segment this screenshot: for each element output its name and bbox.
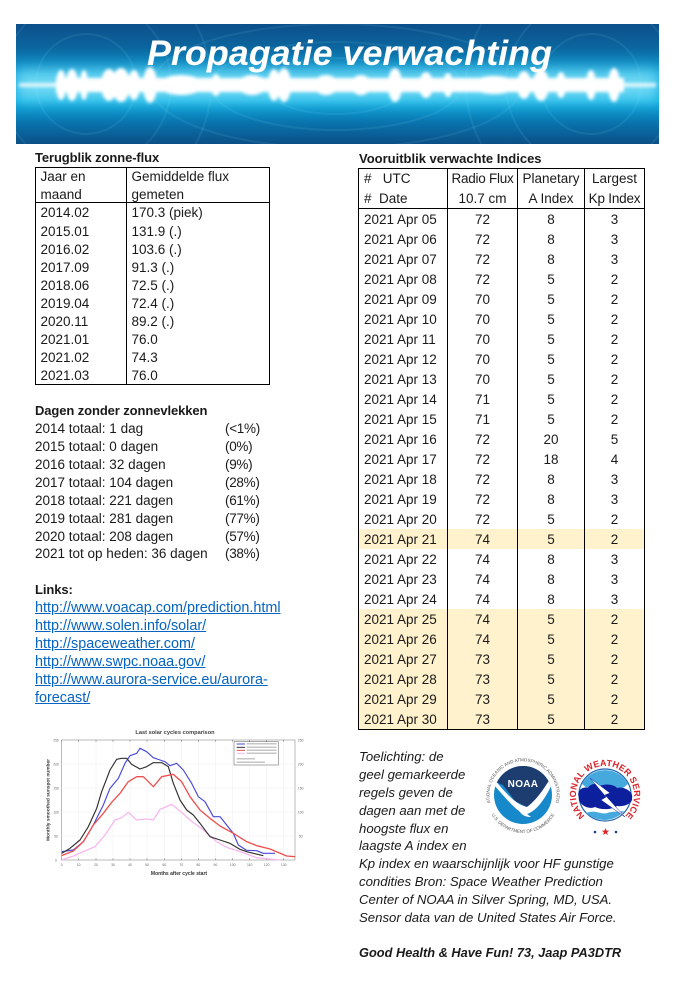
chart: last solar cycles comparison: 100	[53, 811, 59, 815]
chart: last solar cycles comparison: Monthly smoothed sunspot number	[45, 759, 51, 841]
table: vooruitblik verwachte indices: 73	[475, 652, 490, 666]
chart: last solar cycles comparison: 50	[145, 863, 149, 867]
table: vooruitblik verwachte indices: 5	[547, 392, 555, 406]
banner	[16, 24, 659, 144]
table: vooruitblik verwachte indices: 2021 Apr 26	[364, 632, 437, 646]
note: toelichting: dagen aan met de	[359, 803, 465, 818]
table: vooruitblik verwachte indices: 5	[547, 712, 555, 726]
table: vooruitblik verwachte indices: 2021 Apr 24	[364, 592, 437, 606]
table: vooruitblik verwachte indices: 5	[547, 512, 555, 526]
table: terugblik zonne-flux: 2018.06	[40, 278, 89, 293]
note: toelichting: geel gemarkeerde	[359, 767, 465, 782]
table: vooruitblik verwachte indices: 72	[475, 212, 490, 226]
table: vooruitblik verwachte indices: 3	[611, 552, 618, 566]
table: terugblik zonne-flux: 2021.02	[40, 350, 89, 365]
table: vooruitblik verwachte indices: 18	[543, 452, 559, 466]
table: vooruitblik verwachte indices: 5	[611, 432, 618, 446]
table: vooruitblik verwachte indices: Kp Index	[589, 190, 640, 206]
chart: last solar cycles comparison: Months after cycle start	[151, 871, 207, 877]
table: vooruitblik verwachte indices: 2	[611, 392, 618, 406]
table: vooruitblik verwachte indices: 2021 Apr 30	[364, 712, 437, 726]
chart: last solar cycles comparison: 0	[61, 863, 63, 867]
table: vooruitblik verwachte indices: 3	[611, 492, 618, 506]
table: vooruitblik verwachte indices: Radio Flux	[451, 170, 514, 186]
table: vooruitblik verwachte indices: 70	[475, 352, 490, 366]
icon: red star	[602, 828, 609, 835]
table: vooruitblik verwachte indices: 2021 Apr 14	[364, 392, 437, 406]
list: dagen zonder zonnevlekken	[35, 421, 260, 561]
banner title: Propagatie verwachting	[147, 34, 552, 73]
table: terugblik zonne-flux: Jaar en	[40, 169, 86, 184]
table: vooruitblik verwachte indices: 73	[475, 672, 490, 686]
table: vooruitblik verwachte indices: 2	[611, 372, 618, 386]
table: vooruitblik verwachte indices: 2021 Apr 29	[364, 692, 437, 706]
chart: last solar cycles comparison: 150	[298, 787, 304, 791]
chart: last solar cycles comparison: 200	[53, 763, 59, 767]
table: vooruitblik verwachte indices: 2021 Apr 06	[364, 232, 437, 246]
table: vooruitblik verwachte indices: 2021 Apr 27	[364, 652, 437, 666]
table: terugblik zonne-flux: 2021.01	[40, 332, 89, 347]
list: dagen zonder zonnevlekken: 2021 tot op heden: 36 dagen	[35, 546, 208, 561]
list: dagen zonder zonnevlekken: (<1%)	[225, 421, 260, 436]
table: vooruitblik verwachte indices: 3	[611, 472, 618, 486]
table: vooruitblik verwachte indices: 72	[475, 252, 490, 266]
list: dagen zonder zonnevlekken: (61%)	[225, 493, 260, 508]
table: vooruitblik verwachte indices: 2021 Apr 16	[364, 432, 437, 446]
table: vooruitblik verwachte indices: 74	[475, 532, 490, 546]
table: vooruitblik verwachte indices: 2021 Apr 12	[364, 352, 437, 366]
table: vooruitblik verwachte indices: 5	[547, 532, 555, 546]
list: dagen zonder zonnevlekken: (0%)	[225, 439, 252, 454]
table: vooruitblik verwachte indices: 5	[547, 612, 555, 626]
table: vooruitblik verwachte indices: 3	[611, 212, 618, 226]
table: terugblik zonne-flux: 2016.02	[40, 242, 89, 257]
table: vooruitblik verwachte indices: 8	[547, 592, 555, 606]
table: vooruitblik verwachte indices: 2021 Apr 08	[364, 272, 437, 286]
chart: last solar cycles comparison: Last solar cycles comparison	[135, 730, 215, 736]
table: vooruitblik verwachte indices: 2	[611, 512, 618, 526]
table: vooruitblik verwachte indices: 72	[475, 492, 490, 506]
table: vooruitblik verwachte indices: 8	[547, 212, 555, 226]
table: vooruitblik verwachte indices: # UTC	[364, 170, 411, 186]
icon: National Weather Service logo: NATIONAL WEATHER SERVICE	[570, 760, 640, 820]
table: terugblik zonne-flux: 103.6 (.)	[132, 242, 182, 257]
chart: last solar cycles comparison: 120	[264, 863, 270, 867]
table: vooruitblik verwachte indices: 10.7 cm	[458, 190, 507, 206]
table: vooruitblik verwachte indices: 70	[475, 372, 490, 386]
table: vooruitblik verwachte indices: 3	[611, 252, 618, 266]
table: terugblik zonne-flux: 2015.01	[40, 224, 89, 239]
table: terugblik zonne-flux: 72.5 (.)	[132, 278, 174, 293]
table: vooruitblik verwachte indices: 2021 Apr 11	[364, 332, 436, 346]
table: vooruitblik verwachte indices: 2	[611, 612, 618, 626]
chart: last solar cycles comparison: 130	[281, 863, 287, 867]
chart: last solar cycles comparison: 20	[94, 863, 98, 867]
table: vooruitblik verwachte indices: A Index	[528, 190, 574, 206]
table: terugblik zonne-flux	[34, 167, 270, 385]
table: vooruitblik verwachte indices: 72	[475, 472, 490, 486]
chart: last solar cycles comparison: 90	[213, 863, 217, 867]
table: vooruitblik verwachte indices: 2	[611, 352, 618, 366]
note: toelichting: Kp index en waarschijnlijk voor HF gunstige	[359, 856, 614, 871]
table: vooruitblik verwachte indices: 2	[611, 692, 618, 706]
table: vooruitblik verwachte indices: 3	[611, 572, 618, 586]
table: terugblik zonne-flux: 74.3	[132, 350, 158, 365]
list: dagen zonder zonnevlekken: (38%)	[225, 546, 260, 561]
table: vooruitblik verwachte indices	[358, 168, 645, 730]
heading: terugblik zonne-flux: Terugblik zonne-flux	[35, 150, 159, 165]
heading: dagen zonder zonnevlekken: Dagen zonder zonnevlekken	[35, 403, 207, 418]
list: links: http://spaceweather.com/	[35, 636, 195, 652]
table: vooruitblik verwachte indices: 72	[475, 432, 490, 446]
list: dagen zonder zonnevlekken: 2018 totaal: 221 dagen	[35, 493, 173, 508]
table: vooruitblik verwachte indices: 71	[475, 392, 490, 406]
chart: last solar cycles comparison: 0	[55, 859, 57, 863]
table: vooruitblik verwachte indices: 72	[475, 452, 490, 466]
table: vooruitblik verwachte indices: 5	[547, 692, 555, 706]
table: vooruitblik verwachte indices: 2	[611, 672, 618, 686]
table: vooruitblik verwachte indices: # Date	[364, 190, 408, 206]
table: vooruitblik verwachte indices: 2021 Apr 07	[364, 252, 437, 266]
list: links: http://www.aurora-service.eu/aurora-	[35, 672, 268, 688]
table: vooruitblik verwachte indices: 74	[475, 632, 490, 646]
note: toelichting: regels geven de	[359, 785, 453, 800]
table: vooruitblik verwachte indices: 2021 Apr 21	[364, 532, 437, 546]
list: links: http://www.solen.info/solar/	[35, 618, 206, 634]
table: vooruitblik verwachte indices: 2021 Apr 05	[364, 212, 437, 226]
list: dagen zonder zonnevlekken: (28%)	[225, 475, 260, 490]
list: dagen zonder zonnevlekken: 2020 totaal: 208 dagen	[35, 529, 173, 544]
table: vooruitblik verwachte indices: 8	[547, 552, 555, 566]
table: vooruitblik verwachte indices: 2021 Apr 18	[364, 472, 437, 486]
icon: NOAA logo: U.S. DEPARTMENT OF COMMERCE	[492, 813, 554, 833]
chart: last solar cycles comparison: 70	[179, 863, 183, 867]
table: vooruitblik verwachte indices: 2	[611, 312, 618, 326]
chart: last solar cycles comparison: 200	[298, 763, 304, 767]
table: vooruitblik verwachte indices: 71	[475, 412, 490, 426]
table: vooruitblik verwachte indices: 74	[475, 572, 490, 586]
table: vooruitblik verwachte indices: 5	[547, 352, 555, 366]
table: terugblik zonne-flux: 2017.09	[40, 260, 89, 275]
table: vooruitblik verwachte indices: 74	[475, 552, 490, 566]
chart: last solar cycles comparison	[45, 730, 304, 877]
list: links	[35, 600, 281, 706]
heading: vooruitblik verwachte indices: Vooruitblik verwachte Indices	[359, 151, 542, 166]
table: vooruitblik verwachte indices: 2	[611, 412, 618, 426]
table: vooruitblik verwachte indices: 2021 Apr 15	[364, 412, 437, 426]
table: vooruitblik verwachte indices: 2021 Apr 19	[364, 492, 437, 506]
chart: last solar cycles comparison: 50	[299, 835, 303, 839]
chart: last solar cycles comparison: 50	[54, 835, 58, 839]
table: vooruitblik verwachte indices: 5	[547, 312, 555, 326]
table: terugblik zonne-flux: 2014.02	[40, 205, 89, 220]
table: vooruitblik verwachte indices: 5	[547, 272, 555, 286]
table: terugblik zonne-flux: 170.3 (piek)	[132, 205, 203, 220]
note: toelichting: laagste A index en	[359, 838, 467, 853]
table: terugblik zonne-flux: 2021.03	[40, 368, 89, 383]
table: vooruitblik verwachte indices: 73	[475, 692, 490, 706]
heading: links: Links:	[35, 582, 73, 597]
table: vooruitblik verwachte indices: 2	[611, 332, 618, 346]
table: vooruitblik verwachte indices: 2021 Apr 17	[364, 452, 437, 466]
table: terugblik zonne-flux: 91.3 (.)	[132, 260, 174, 275]
table: vooruitblik verwachte indices: 2021 Apr 28	[364, 672, 437, 686]
table: vooruitblik verwachte indices: 2021 Apr 10	[364, 312, 437, 326]
table: vooruitblik verwachte indices: 2021 Apr 09	[364, 292, 437, 306]
table: terugblik zonne-flux: 2019.04	[40, 296, 89, 311]
table: vooruitblik verwachte indices: 70	[475, 332, 490, 346]
table: vooruitblik verwachte indices: 5	[547, 292, 555, 306]
table: vooruitblik verwachte indices: 5	[547, 652, 555, 666]
table: vooruitblik verwachte indices: 72	[475, 512, 490, 526]
list: links: http://www.voacap.com/prediction.html	[35, 600, 281, 616]
table: vooruitblik verwachte indices: 70	[475, 292, 490, 306]
table: vooruitblik verwachte indices: 5	[547, 332, 555, 346]
chart: last solar cycles comparison: 150	[53, 787, 59, 791]
table: vooruitblik verwachte indices: 8	[547, 472, 555, 486]
table: vooruitblik verwachte indices: 2	[611, 632, 618, 646]
table: vooruitblik verwachte indices: 2021 Apr 23	[364, 572, 437, 586]
chart: last solar cycles comparison: 250	[53, 739, 59, 743]
table: vooruitblik verwachte indices: 8	[547, 232, 555, 246]
table: vooruitblik verwachte indices: 2021 Apr 13	[364, 372, 437, 386]
note: toelichting: Toelichting: de	[359, 749, 444, 764]
table: vooruitblik verwachte indices: 20	[543, 432, 559, 446]
list: dagen zonder zonnevlekken: (9%)	[225, 457, 252, 472]
note: toelichting: Center of NOAA in Silver Spring, MD, USA.	[359, 892, 612, 907]
note: toelichting: hoogste flux en	[359, 821, 448, 836]
list: links: http://www.swpc.noaa.gov/	[35, 654, 205, 670]
list: links: forecast/	[35, 690, 90, 706]
table: vooruitblik verwachte indices: 2021 Apr 20	[364, 512, 437, 526]
table: vooruitblik verwachte indices: 2	[611, 292, 618, 306]
chart: last solar cycles comparison: 60	[162, 863, 166, 867]
table: vooruitblik verwachte indices: 3	[611, 592, 618, 606]
note: toelichting: Sensor data van de United States Air Force.	[359, 910, 617, 925]
chart: last solar cycles comparison: 80	[196, 863, 200, 867]
table: vooruitblik verwachte indices: 2021 Apr 25	[364, 612, 437, 626]
table: terugblik zonne-flux: 76.0	[132, 332, 158, 347]
chart: last solar cycles comparison: 10	[77, 863, 81, 867]
table: vooruitblik verwachte indices: Planetary	[522, 170, 580, 186]
table: vooruitblik verwachte indices: 2	[611, 532, 618, 546]
list: dagen zonder zonnevlekken: (57%)	[225, 529, 260, 544]
note: toelichting: Good Health & Have Fun! 73, Jaap PA3DTR	[359, 945, 621, 960]
table: vooruitblik verwachte indices: 2	[611, 652, 618, 666]
table: vooruitblik verwachte indices: 5	[547, 412, 555, 426]
table: vooruitblik verwachte indices: 2	[611, 712, 618, 726]
table: vooruitblik verwachte indices: 8	[547, 572, 555, 586]
table: vooruitblik verwachte indices: 73	[475, 712, 490, 726]
table: vooruitblik verwachte indices: 4	[611, 452, 618, 466]
list: dagen zonder zonnevlekken: 2014 totaal: 1 dag	[35, 421, 143, 436]
note: toelichting	[359, 749, 621, 960]
table: vooruitblik verwachte indices: 3	[611, 232, 618, 246]
table: terugblik zonne-flux: 76.0	[132, 368, 158, 383]
chart: last solar cycles comparison: 110	[247, 863, 252, 867]
table: vooruitblik verwachte indices: 2	[611, 272, 618, 286]
icon: NOAA logo	[486, 758, 560, 833]
table: vooruitblik verwachte indices: 74	[475, 592, 490, 606]
table: vooruitblik verwachte indices: 72	[475, 272, 490, 286]
table: terugblik zonne-flux: 131.9 (.)	[132, 224, 182, 239]
table: terugblik zonne-flux: 2020.11	[40, 314, 88, 329]
note: toelichting: condities Bron: Space Weather Prediction	[359, 874, 603, 889]
chart: last solar cycles comparison: 40	[128, 863, 132, 867]
table: vooruitblik verwachte indices: 8	[547, 492, 555, 506]
chart: last solar cycles comparison: 250	[298, 739, 304, 743]
list: dagen zonder zonnevlekken: 2019 totaal: 281 dagen	[35, 511, 173, 526]
table: terugblik zonne-flux: 89.2 (.)	[132, 314, 174, 329]
table: vooruitblik verwachte indices: 2021 Apr 22	[364, 552, 437, 566]
table: vooruitblik verwachte indices: 70	[475, 312, 490, 326]
table: vooruitblik verwachte indices: 5	[547, 672, 555, 686]
table: vooruitblik verwachte indices: 72	[475, 232, 490, 246]
table: terugblik zonne-flux: maand	[40, 187, 82, 202]
table: vooruitblik verwachte indices: Largest	[592, 170, 637, 186]
table: vooruitblik verwachte indices: 8	[547, 252, 555, 266]
list: dagen zonder zonnevlekken: 2017 totaal: 104 dagen	[35, 475, 173, 490]
table: vooruitblik verwachte indices: 5	[547, 632, 555, 646]
table: terugblik zonne-flux: 72.4 (.)	[132, 296, 174, 311]
icon: NOAA logo: NOAA	[508, 779, 538, 790]
table: terugblik zonne-flux: gemeten	[132, 187, 184, 202]
table: vooruitblik verwachte indices: 74	[475, 612, 490, 626]
table: terugblik zonne-flux: Gemiddelde flux	[132, 169, 229, 184]
chart: last solar cycles comparison: 100	[298, 811, 304, 815]
list: dagen zonder zonnevlekken: 2015 totaal: 0 dagen	[35, 439, 158, 454]
chart: last solar cycles comparison: 30	[111, 863, 115, 867]
list: dagen zonder zonnevlekken: 2016 totaal: 32 dagen	[35, 457, 166, 472]
list: dagen zonder zonnevlekken: (77%)	[225, 511, 260, 526]
table: vooruitblik verwachte indices: 5	[547, 372, 555, 386]
chart: last solar cycles comparison: 100	[230, 863, 236, 867]
